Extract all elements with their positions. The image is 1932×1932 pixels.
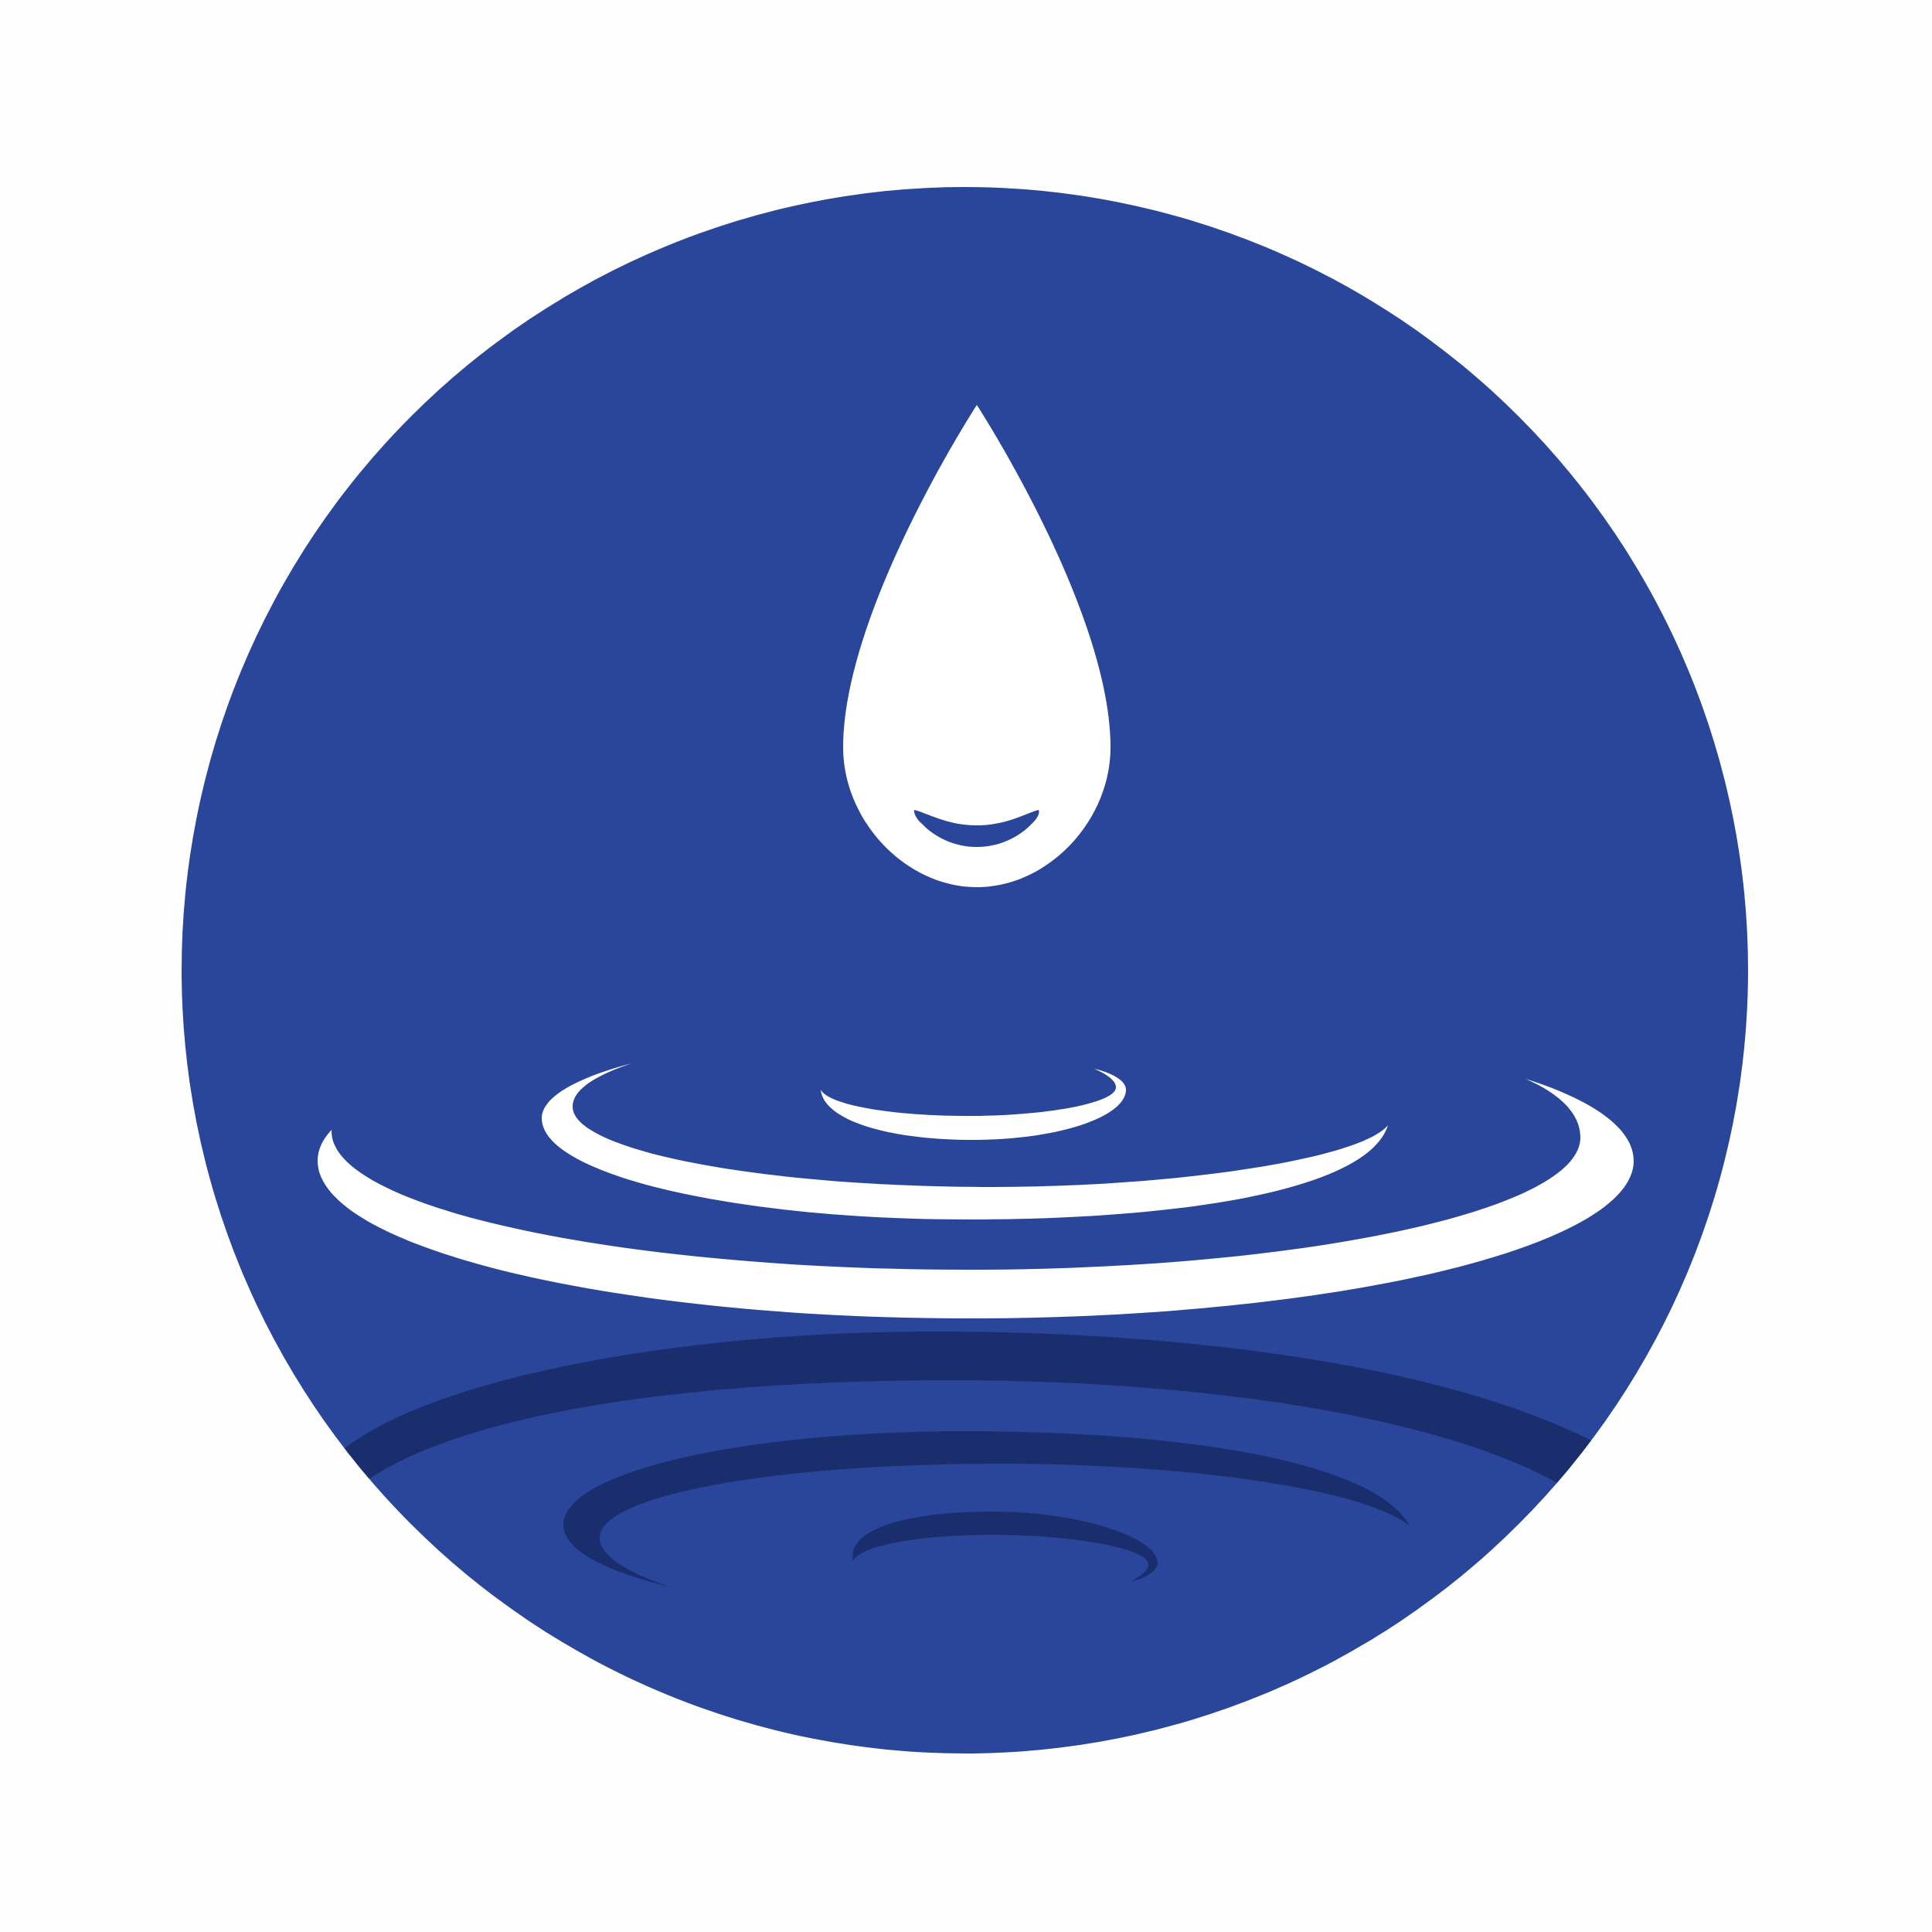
icon: falling water drop <box>843 405 1111 887</box>
panel: blue circle background <box>182 187 1748 1753</box>
inner dark ripple <box>852 1512 1158 1582</box>
water drop ripple badge <box>182 187 1748 1753</box>
drop highlight <box>914 810 1039 847</box>
dark ripples reflection <box>332 1332 1607 1587</box>
middle white ripple <box>542 1063 1388 1219</box>
middle dark ripple <box>563 1431 1410 1587</box>
white ripples on water surface <box>318 1063 1634 1318</box>
inner white ripple <box>821 1069 1126 1140</box>
outer dark ripple <box>332 1332 1607 1495</box>
outer white ripple <box>318 1079 1634 1318</box>
